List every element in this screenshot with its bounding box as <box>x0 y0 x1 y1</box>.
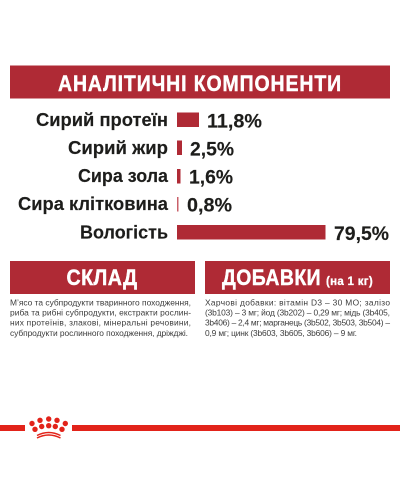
text: additives list <box>205 298 390 338</box>
row: crude fibre: 0,8% <box>187 194 232 216</box>
heading: composition: СКЛАД <box>66 265 138 290</box>
text: composition ingredients: риба та рибні субпродукти, екстракти рослин- <box>10 308 191 318</box>
text: additives list: (3b103) – 3 мг; йод (3b202) – 0,29 мг; мідь (3b405, <box>205 308 390 318</box>
row: crude ash <box>78 166 233 188</box>
panel: analytical components header <box>10 66 390 98</box>
chart: analytical components bars <box>18 110 389 245</box>
panel: composition <box>10 261 195 338</box>
row: crude protein: Сирий протеїн <box>36 110 168 130</box>
footer: brand line with crown <box>0 416 400 438</box>
heading: additives per kg: (на 1 кг) <box>326 274 373 288</box>
row: crude fat: Сирий жир <box>68 138 168 158</box>
text: composition ingredients: М’ясо та субпродукти тваринного походження, <box>10 298 191 308</box>
row: crude fibre <box>18 194 232 216</box>
row: moisture: 79,5% <box>334 223 389 245</box>
row: crude protein <box>36 110 262 132</box>
icon: royal canin crown <box>29 416 68 438</box>
text: composition ingredients: субпродукти рослинного походження, дріжджі. <box>10 328 188 338</box>
row: crude fibre: Сира клітковина <box>18 194 169 214</box>
row: moisture <box>80 222 389 245</box>
text: additives list: 3b406) – 2,4 мг; марганець (3b502, 3b503, 3b504) – <box>205 318 390 328</box>
heading: additives per kg: ДОБАВКИ <box>222 265 321 290</box>
heading: additives per kg <box>205 261 390 294</box>
panel: additives <box>205 261 390 338</box>
heading: composition <box>10 261 195 294</box>
text: composition ingredients: них протеїнів, злакові, мінеральні речовини, <box>10 318 191 328</box>
row: crude ash: 1,6% <box>189 166 233 188</box>
text: additives list: 0,9 мг; цинк (3b603, 3b605, 3b606) – 9 мг. <box>205 328 357 338</box>
text: additives list: Харчові добавки: вітамін D3 – 30 МО; залізо <box>205 298 390 308</box>
row: crude fat: 2,5% <box>190 138 234 160</box>
panel: analytical components header: АНАЛІТИЧНІ КОМПОНЕНТИ <box>58 71 342 96</box>
row: crude fat <box>68 138 234 160</box>
row: moisture: Вологість <box>80 222 168 242</box>
row: crude protein: 11,8% <box>207 110 262 132</box>
text: composition ingredients <box>10 298 191 338</box>
row: crude ash: Сира зола <box>78 166 169 186</box>
